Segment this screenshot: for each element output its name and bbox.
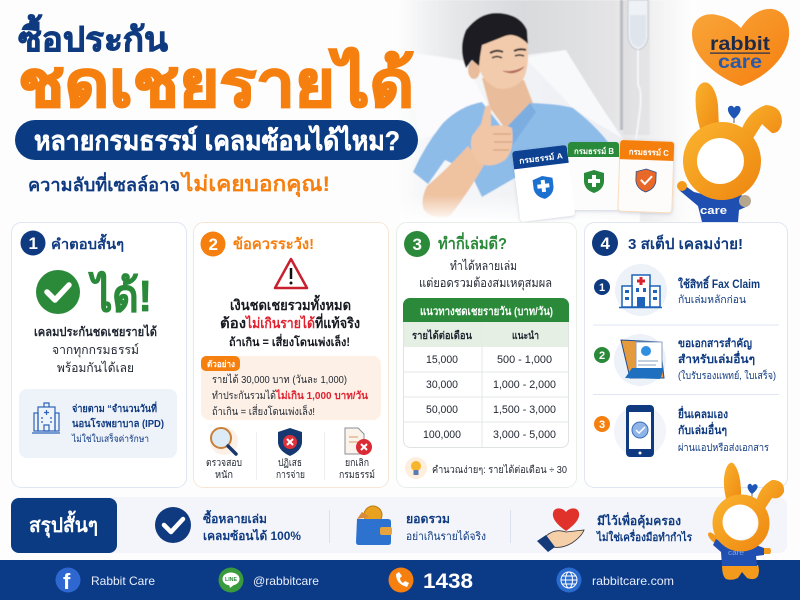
table: แนวทางชดเชยรายวัน: 1,500 - 3,000 — [493, 404, 556, 416]
point 2 — [356, 506, 486, 545]
card: กรมธรรม์ A: กรมธรรม์ A — [519, 150, 564, 166]
point 2: อย่าเกินรายได้จริง — [406, 530, 486, 543]
info box: IPD: ไม่ใช่ใบเสร็จค่ารักษา — [71, 432, 149, 445]
intro text — [419, 259, 552, 291]
mascot: rabbit top right: care — [700, 205, 727, 217]
hero photo: patient in hospital bed — [400, 0, 695, 222]
panel 1: คำตอบสั้นๆ — [12, 222, 186, 488]
table: แนวทางชดเชยรายวัน: 500 - 1,000 — [497, 354, 552, 366]
icon: hospital — [619, 275, 662, 308]
warning text: ต้อง — [220, 315, 246, 331]
summary bar — [11, 497, 787, 553]
consequence: ตรวจสอบหนัก: ตรวจสอบ — [206, 458, 242, 469]
footer: facebook: Rabbit Care — [91, 574, 155, 588]
consequence: ยกเลิกกรมธรรม์: ยกเลิก — [345, 458, 369, 469]
step 3: 3 — [599, 419, 605, 431]
example box: ถ้าเกิน = เสี่ยงโดนเพ่งเล็ง! — [212, 404, 315, 418]
answer text — [34, 324, 157, 375]
warning text: ถ้าเกิน = เสี่ยงโดนเพ่งเล็ง! — [229, 333, 350, 349]
title: ชดเชยรายได้: ชดเชยรายได้ — [18, 47, 414, 120]
consequence: ยกเลิกกรมธรรม์: กรมธรรม์ — [339, 469, 375, 481]
info box: IPD: นอนโรงพยาบาล (IPD) — [72, 417, 164, 430]
tagline — [28, 171, 330, 198]
example box: รายได้ 30,000 บาท (วันละ 1,000) — [212, 373, 347, 386]
example box: ทำประกันรวมได้ — [212, 389, 276, 402]
panel 2: ข้อควรระวัง — [194, 222, 388, 488]
warning text: ไม่เกินรายได้ — [244, 314, 315, 331]
footer: facebook: f — [63, 569, 71, 594]
heading: คำตอบสั้นๆ — [51, 233, 124, 252]
example box — [201, 356, 381, 420]
answer: ได้!: ได้! — [88, 270, 152, 321]
consequence: ปฏิเสธการจ่าย: ปฏิเสธ — [278, 458, 302, 469]
point 3: ไม่ใช่เครื่องมือทำกำไร — [595, 529, 692, 544]
example box: ไม่เกิน 1,000 บาท/วัน — [275, 389, 369, 402]
footer: phone — [388, 568, 473, 593]
blue shirt — [413, 102, 608, 197]
table: แนวทางชดเชยรายวัน: 1,000 - 2,000 — [493, 379, 556, 391]
intro text: ทำได้หลายเล่ม — [450, 259, 517, 273]
card: กรมธรรม์ C — [618, 140, 674, 213]
footer: line: LINE — [225, 577, 238, 583]
icon: phone — [626, 405, 654, 457]
step 2 — [594, 334, 776, 386]
card: กรมธรรม์ B: กรมธรรม์ B — [574, 146, 614, 156]
table: แนวทางชดเชยรายวัน — [403, 298, 569, 448]
card: กรมธรรม์ A — [512, 145, 575, 222]
consequence: ยกเลิกกรมธรรม์ — [339, 428, 375, 481]
tagline: ไม่เคยบอกคุณ! — [180, 171, 330, 198]
table: แนวทางชดเชยรายวัน: 15,000 — [426, 354, 458, 366]
footer: line — [218, 568, 319, 592]
info box: IPD — [19, 389, 177, 458]
answer text: จากทุกกรมธรรม์ — [52, 343, 139, 358]
heading: ทำกี่เล่มดี? — [438, 232, 507, 253]
intro text: แต่ยอดรวมต้องสมเหตุสมผล — [419, 276, 552, 291]
badge 4 — [592, 230, 618, 256]
badge 3: 3 — [412, 235, 422, 254]
tagline: ความลับที่เซลล์อาจ — [28, 172, 180, 195]
table: แนวทางชดเชยรายวัน: แนวทางชดเชยรายวัน (บาท/วัน) — [420, 305, 553, 318]
icon: document folder — [621, 340, 664, 379]
subtitle pill — [15, 120, 418, 160]
consequence: ตรวจสอบหนัก — [206, 427, 242, 481]
logo: rabbit care heart — [692, 9, 789, 86]
mascot: rabbit bottom right — [708, 463, 784, 580]
info box: IPD: จ่ายตาม “จำนวนวันที่ — [72, 401, 157, 415]
table: แนวทางชดเชยรายวัน: แนะนำ — [512, 330, 539, 342]
footer: website: rabbitcare.com — [592, 574, 674, 588]
table: แนวทางชดเชยรายวัน: 100,000 — [423, 429, 461, 441]
icon: hospital — [32, 403, 60, 433]
panel 3: ทำกี่เล่มดี — [396, 222, 576, 488]
heading: 3 สเต็ป เคลมง่าย! — [628, 234, 743, 253]
card: กรมธรรม์ B — [568, 142, 619, 210]
step 1: กับเล่มหลักก่อน — [678, 294, 746, 306]
IV stand and drip bag — [620, 0, 650, 140]
badge 2: 2 — [208, 235, 218, 254]
step 1: 1 — [599, 282, 605, 294]
step 2: (ใบรับรองแพทย์, ใบเสร็จ) — [678, 368, 776, 382]
consequence: ตรวจสอบหนัก: หนัก — [215, 470, 233, 481]
heading: สรุปสั้นๆ: สรุปสั้นๆ — [29, 510, 98, 538]
step 3: ยื่นเคลมเอง — [678, 405, 728, 421]
step 2: 2 — [599, 350, 605, 362]
step 3 — [594, 405, 770, 457]
warning text — [220, 294, 360, 349]
table: แนวทางชดเชยรายวัน: รายได้ต่อเดือน — [412, 329, 473, 342]
subtitle pill: หลายกรมธรรม์ เคลมซ้อนได้ไหม? — [34, 125, 400, 156]
policy cards — [512, 140, 674, 222]
raised arm and thumb-up — [423, 105, 513, 217]
answer text: พร้อมกันได้เลย — [57, 361, 134, 375]
panel 4: 3 สเต็ป เคลมง่าย — [584, 222, 788, 488]
face and hair — [462, 13, 528, 89]
step 1 — [594, 264, 760, 316]
heading: ข้อควรระวัง! — [233, 236, 314, 253]
step 1: ใช้สิทธิ์ Fax Claim — [678, 275, 760, 291]
logo: rabbit care heart: rabbit — [710, 34, 771, 55]
consequence: ปฏิเสธการจ่าย: การจ่าย — [276, 470, 305, 481]
example box: ตัวอย่าง — [207, 359, 235, 369]
badge 2 — [200, 232, 226, 256]
badge 1: 1 — [28, 234, 38, 253]
heading: สรุปสั้นๆ — [11, 498, 117, 553]
footer: facebook — [56, 568, 155, 594]
step 2: ขอเอกสารสำคัญ — [678, 336, 752, 350]
table: แนวทางชดเชยรายวัน: 30,000 — [426, 379, 458, 391]
footer bar — [0, 560, 800, 600]
card: กรมธรรม์ C: กรมธรรม์ C — [629, 146, 669, 158]
icon: green check — [36, 270, 80, 314]
footer: line: @rabbitcare — [253, 574, 319, 588]
badge 3 — [404, 231, 430, 257]
badge 4: 4 — [600, 234, 610, 253]
step 3: กับเล่มอื่นๆ — [678, 421, 727, 437]
step 3: ผ่านแอปหรือส่งเอกสาร — [678, 442, 770, 454]
title: ซื้อประกัน: ซื้อประกัน — [18, 14, 168, 59]
point 1: เคลมซ้อนได้ 100% — [203, 528, 301, 543]
icon: light bulb — [405, 457, 427, 479]
logo: rabbit care heart: care — [718, 52, 762, 73]
badge 1 — [20, 230, 46, 256]
table: แนวทางชดเชยรายวัน: 3,000 - 5,000 — [493, 429, 556, 441]
mascot: rabbit top right — [677, 82, 782, 222]
neck — [482, 78, 535, 135]
point 2: ยอดรวม — [406, 512, 450, 526]
answer text: เคลมประกันชดเชยรายได้ — [34, 324, 157, 339]
tip text: คำนวณง่ายๆ: รายได้ต่อเดือน ÷ 30 — [432, 464, 567, 476]
mascot: rabbit bottom right: care — [728, 550, 744, 557]
consequence: ปฏิเสธการจ่าย — [276, 428, 305, 481]
warning text: ที่แท้จริง — [315, 313, 360, 331]
step 2: สำหรับเล่มอื่นๆ — [678, 350, 755, 366]
footer: phone: 1438 — [423, 570, 473, 593]
icon: warning triangle — [275, 259, 307, 288]
warning text: เงินชดเชยรวมทั้งหมด — [230, 294, 351, 313]
point 3: มีไว้เพื่อคุ้มครอง — [597, 512, 681, 529]
pillow and bed sheet — [400, 50, 630, 222]
point 1 — [155, 507, 301, 543]
point 3 — [537, 508, 692, 552]
point 1: ซื้อหลายเล่ม — [203, 509, 267, 526]
table: แนวทางชดเชยรายวัน: 50,000 — [426, 404, 458, 416]
footer: website — [556, 568, 674, 592]
